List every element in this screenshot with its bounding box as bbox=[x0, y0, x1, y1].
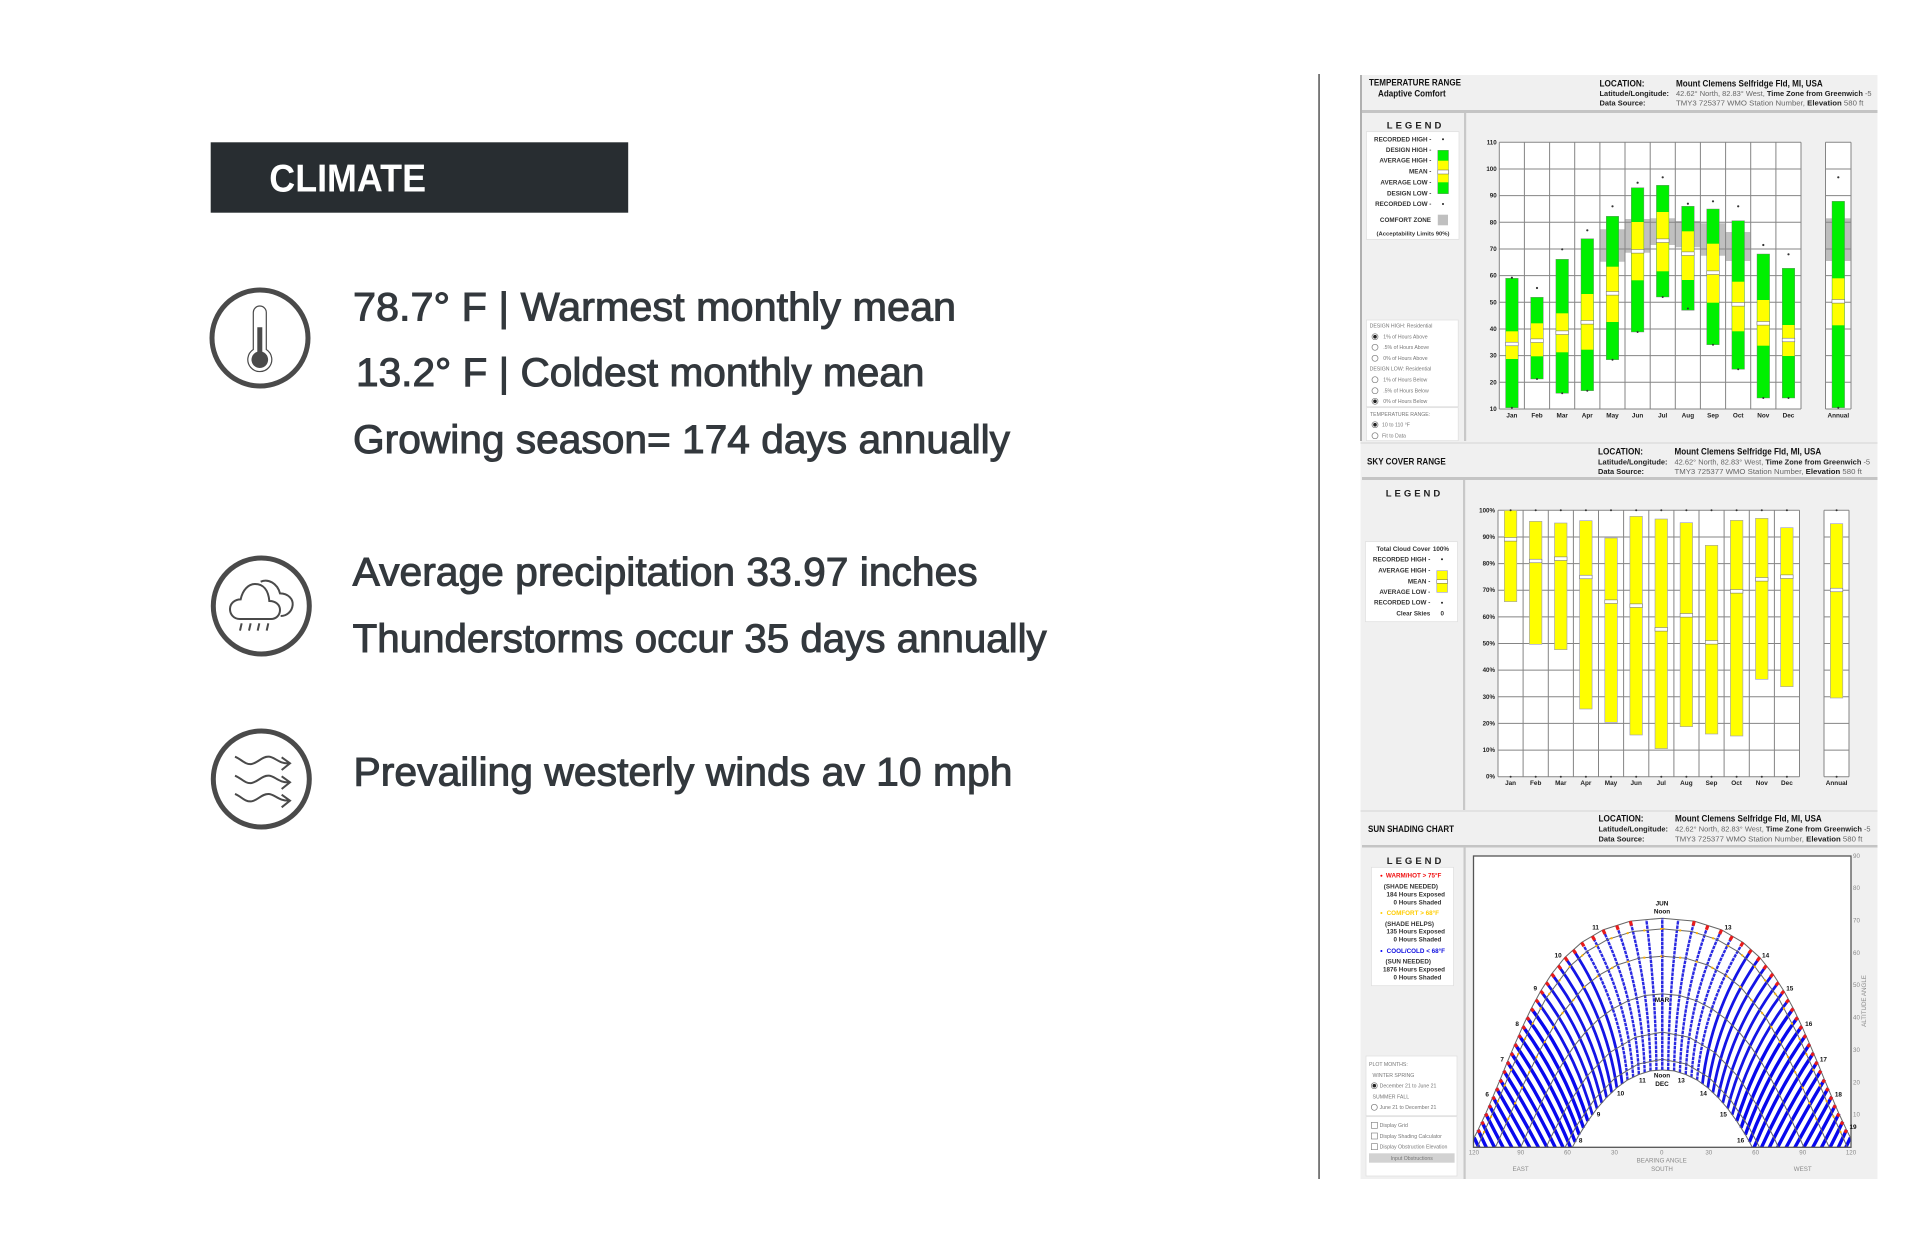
controls: plot months: Display Shading Calculator bbox=[1380, 1134, 1442, 1140]
chart: sun path diagram: 15 bbox=[1786, 986, 1794, 993]
chart: sun path diagram: 9 bbox=[1534, 986, 1538, 993]
text block: precipitation bbox=[353, 550, 1047, 661]
chart: sun path diagram: 90 bbox=[1799, 1150, 1807, 1157]
chart: sun path diagram: 10 bbox=[1617, 1091, 1625, 1098]
bar chart: monthly sky cover: Annual bbox=[1826, 780, 1848, 787]
bar chart: monthly sky cover: 0% bbox=[1486, 774, 1495, 781]
bar chart: monthly temperature: Jun bbox=[1632, 412, 1643, 420]
legend: sun shading: 1876 Hours Exposed bbox=[1383, 967, 1445, 974]
legend: sun shading: 135 Hours Exposed bbox=[1387, 929, 1445, 936]
controls: plot months: WINTER SPRING bbox=[1372, 1073, 1414, 1079]
controls: plot months: June 21 to December 21 bbox=[1380, 1105, 1437, 1111]
controls: design options: 0% of Hours Below bbox=[1383, 399, 1428, 405]
controls: plot months: SUMMER FALL bbox=[1372, 1094, 1409, 1100]
legend: temperature: LEGEND bbox=[1387, 120, 1444, 131]
header: temperature range: Adaptive Comfort bbox=[1378, 89, 1446, 99]
panel: climate charts bbox=[1360, 75, 1878, 1241]
legend: sun shading: WARM/HOT > 75°F bbox=[1386, 872, 1442, 880]
controls: design options: Fit to Data bbox=[1382, 434, 1406, 440]
chart: sun path diagram: 18 bbox=[1835, 1091, 1842, 1098]
chart: sun path diagram: 30 bbox=[1853, 1047, 1860, 1054]
controls: design options: 1% of Hours Above bbox=[1383, 334, 1428, 340]
bar chart: monthly temperature: 20 bbox=[1490, 379, 1497, 386]
header: temperature range: Latitude/Longitude: bbox=[1600, 89, 1669, 98]
bar chart: monthly temperature: Annual bbox=[1827, 412, 1849, 420]
text block: wind: Prevailing westerly winds av 10 mph bbox=[354, 750, 1012, 794]
chart: sun path diagram: 6 bbox=[1485, 1091, 1489, 1098]
bar chart: monthly temperature: Feb bbox=[1531, 412, 1543, 420]
bar chart: monthly sky cover: Apr bbox=[1580, 780, 1592, 787]
bar chart: monthly sky cover: 80% bbox=[1483, 561, 1495, 568]
header: temperature range: TMY3 725377 WMO Station Number, Elevation 580 ft bbox=[1676, 99, 1864, 108]
legend: sun shading: (SHADE HELPS) bbox=[1385, 921, 1434, 928]
header: temperature range bbox=[1362, 77, 1878, 113]
bar chart: monthly sky cover: 90% bbox=[1483, 534, 1495, 541]
text block: temperature: Growing season= 174 days annually bbox=[353, 418, 1010, 462]
bar chart: monthly sky cover: 20% bbox=[1483, 720, 1495, 727]
bar chart: monthly sky cover: Nov bbox=[1756, 780, 1768, 787]
header: sky cover: SKY COVER RANGE bbox=[1367, 457, 1446, 467]
chart: sun path diagram: 40 bbox=[1853, 1014, 1860, 1022]
chart: sun path diagram: 50 bbox=[1853, 982, 1860, 989]
bar chart: monthly sky cover: Dec bbox=[1781, 780, 1793, 787]
legend: sun shading: (SUN NEEDED) bbox=[1386, 959, 1431, 966]
header: sky cover bbox=[1362, 446, 1878, 480]
legend: sky cover: RECORDED LOW - bbox=[1374, 600, 1430, 607]
chart: sun path diagram: 60 bbox=[1564, 1150, 1571, 1157]
bar chart: monthly temperature: May bbox=[1606, 412, 1619, 420]
chart: sun path diagram: 16 bbox=[1805, 1021, 1813, 1028]
chart: sun path diagram: 30 bbox=[1611, 1150, 1618, 1157]
bar chart: monthly sky cover: Jul bbox=[1657, 780, 1666, 787]
bar chart: monthly sky cover: May bbox=[1605, 780, 1618, 787]
bar chart: monthly temperature: Oct bbox=[1733, 412, 1744, 420]
bar chart: monthly sky cover: Oct bbox=[1731, 780, 1743, 787]
legend: temperature: AVERAGE LOW - bbox=[1380, 180, 1431, 187]
controls: design options bbox=[1366, 320, 1458, 441]
legend: temperature: DESIGN HIGH - bbox=[1386, 147, 1431, 154]
bar chart: monthly sky cover: 100% bbox=[1479, 507, 1495, 514]
chart: sun path diagram: 9 bbox=[1597, 1111, 1601, 1118]
chart: sun path diagram: BEARING ANGLE bbox=[1637, 1158, 1687, 1165]
chart: sun path diagram: 7 bbox=[1500, 1056, 1504, 1063]
chart: sun path diagram: 90 bbox=[1517, 1150, 1525, 1157]
controls: design options: TEMPERATURE RANGE: bbox=[1370, 412, 1430, 418]
bar chart: monthly sky cover: Jun bbox=[1631, 780, 1642, 787]
icon: rain cloud bbox=[213, 558, 309, 654]
legend: sun shading: COMFORT > 68°F bbox=[1387, 909, 1439, 917]
chart: sun path diagram: 90 bbox=[1853, 853, 1860, 860]
chart: sun path diagram: EAST bbox=[1513, 1166, 1529, 1173]
legend: temperature: MEAN - bbox=[1409, 169, 1431, 176]
legend: temperature: (Acceptability Limits 90%) bbox=[1376, 231, 1450, 237]
bar chart: monthly sky cover: Sep bbox=[1706, 780, 1717, 787]
bar chart: monthly sky cover: Jan bbox=[1505, 780, 1516, 787]
legend: sky cover: AVERAGE LOW - bbox=[1379, 589, 1430, 596]
chart: sun path diagram: ALTITUDE ANGLE bbox=[1861, 975, 1868, 1027]
panel: temperature range chart bbox=[1362, 77, 1878, 441]
icon: wind bbox=[213, 731, 309, 827]
bar chart: monthly sky cover: 40% bbox=[1483, 667, 1495, 674]
panel: sun shading chart bbox=[1362, 815, 1878, 1179]
text block: precipitation: Average precipitation 33.97 inches bbox=[353, 550, 978, 594]
header: sky cover: Latitude/Longitude: bbox=[1598, 457, 1668, 466]
chart: sun path diagram: 8 bbox=[1579, 1137, 1583, 1144]
header: sun shading: Data Source: bbox=[1598, 834, 1644, 843]
bar chart: monthly temperature: 70 bbox=[1490, 246, 1497, 253]
header: temperature range: Data Source: bbox=[1600, 99, 1646, 108]
bar chart: monthly temperature: 50 bbox=[1490, 299, 1497, 306]
legend: sky cover bbox=[1365, 489, 1458, 622]
chart: sun path diagram: 60 bbox=[1752, 1150, 1760, 1157]
header: temperature range: TEMPERATURE RANGE bbox=[1369, 77, 1461, 87]
bar chart: monthly temperature: Apr bbox=[1582, 412, 1593, 420]
legend: sun shading: 184 Hours Exposed bbox=[1387, 891, 1445, 898]
chart: sun path diagram: 14 bbox=[1700, 1091, 1707, 1098]
bar chart: monthly sky cover: 60% bbox=[1483, 614, 1495, 621]
legend: temperature bbox=[1366, 120, 1459, 239]
chart: sun path diagram: Noon bbox=[1654, 1073, 1670, 1080]
chart: sun path diagram: 120 bbox=[1846, 1150, 1857, 1157]
legend: sun shading: 0 Hours Shaded bbox=[1393, 937, 1442, 944]
chart: sun path diagram: SOUTH bbox=[1651, 1166, 1673, 1173]
chart: sun path diagram: 15 bbox=[1720, 1111, 1727, 1118]
chart: sun path diagram: Noon bbox=[1654, 909, 1670, 916]
chart: sun path diagram: 16 bbox=[1737, 1137, 1745, 1144]
legend: sun shading: COOL/COLD < 68°F bbox=[1387, 947, 1445, 955]
header: sun shading: Mount Clemens Selfridge Fld, MI, USA bbox=[1675, 814, 1822, 824]
legend: sun shading bbox=[1371, 856, 1454, 986]
legend: temperature: RECORDED HIGH - bbox=[1374, 136, 1431, 143]
bar chart: monthly sky cover: Feb bbox=[1530, 780, 1541, 787]
chart: sun path diagram: 120 bbox=[1469, 1150, 1480, 1157]
header: sun shading bbox=[1362, 814, 1878, 848]
chart: sun path diagram: 20 bbox=[1853, 1080, 1860, 1086]
legend: temperature: AVERAGE HIGH - bbox=[1379, 158, 1431, 165]
controls: plot months bbox=[1366, 1056, 1457, 1176]
bar chart: monthly temperature: 10 bbox=[1490, 406, 1497, 413]
chart: sun path diagram: 8 bbox=[1515, 1021, 1519, 1028]
controls: plot months: PLOT MONTHS: bbox=[1369, 1062, 1408, 1068]
bar chart: monthly temperature: 90 bbox=[1490, 193, 1497, 200]
controls: design options: DESIGN HIGH: Residential bbox=[1370, 324, 1432, 330]
legend: sky cover: 100% bbox=[1433, 546, 1449, 553]
header: sky cover: Data Source: bbox=[1598, 467, 1644, 476]
controls: plot months: December 21 to June 21 bbox=[1380, 1084, 1437, 1090]
legend: sky cover: LEGEND bbox=[1386, 489, 1443, 500]
header: sun shading: TMY3 725377 WMO Station Number, Elevation 580 ft bbox=[1675, 834, 1863, 843]
title text: CLIMATE bbox=[269, 158, 426, 201]
chart: sun path diagram: 0 bbox=[1660, 1150, 1664, 1157]
bar chart: monthly temperature: Sep bbox=[1707, 412, 1719, 420]
header: sun shading: SUN SHADING CHART bbox=[1368, 824, 1455, 834]
chart: sun path diagram: 14 bbox=[1762, 952, 1770, 959]
chart: sun path diagram: JUN bbox=[1656, 901, 1669, 908]
controls: design options: 0% of Hours Above bbox=[1383, 356, 1428, 362]
legend: sky cover: RECORDED HIGH - bbox=[1373, 556, 1430, 563]
chart: sun path diagram: 60 bbox=[1853, 950, 1860, 957]
chart: sun path diagram: 70 bbox=[1853, 918, 1860, 924]
bar chart: monthly temperature: Jul bbox=[1658, 412, 1668, 420]
legend: temperature: COMFORT ZONE bbox=[1380, 217, 1431, 224]
chart: sun path diagram: 11 bbox=[1592, 925, 1599, 932]
chart: sun path diagram: 10 bbox=[1555, 952, 1562, 959]
bar chart: monthly temperature: Aug bbox=[1682, 412, 1694, 420]
legend: sky cover: Total Cloud Cover bbox=[1377, 546, 1431, 553]
header: temperature range: Mount Clemens Selfridge Fld, MI, USA bbox=[1676, 78, 1823, 88]
title banner bbox=[211, 142, 628, 213]
text block: temperature bbox=[353, 286, 1010, 462]
legend: sun shading: 0 Hours Shaded bbox=[1393, 899, 1442, 906]
bar chart: monthly sky cover: 50% bbox=[1483, 640, 1495, 648]
chart: sun path diagram: MAR bbox=[1655, 997, 1670, 1004]
legend: sky cover: MEAN - bbox=[1408, 578, 1430, 585]
bar chart: monthly temperature: 60 bbox=[1490, 273, 1497, 280]
chart: sun path diagram: DEC bbox=[1655, 1081, 1669, 1088]
bar chart: monthly temperature: Nov bbox=[1757, 412, 1770, 420]
controls: design options: DESIGN LOW: Residential bbox=[1370, 366, 1431, 372]
bar chart: monthly temperature: Mar bbox=[1557, 412, 1568, 420]
header: temperature range: LOCATION: bbox=[1600, 78, 1645, 88]
chart: sun path diagram: 19 bbox=[1849, 1124, 1857, 1131]
controls: design options: 10 to 110 °F bbox=[1382, 422, 1410, 428]
controls: design options: .5% of Hours Below bbox=[1383, 388, 1429, 394]
chart: sun path diagram: 80 bbox=[1853, 885, 1860, 892]
bar chart: monthly sky cover: Mar bbox=[1555, 780, 1567, 787]
legend: sun shading: LEGEND bbox=[1387, 856, 1444, 867]
header: sun shading: Latitude/Longitude: bbox=[1598, 825, 1668, 834]
controls: design options: .5% of Hours Above bbox=[1383, 345, 1429, 351]
bar chart: monthly sky cover: Aug bbox=[1680, 780, 1693, 787]
header: sky cover: TMY3 725377 WMO Station Number, Elevation 580 ft bbox=[1674, 467, 1863, 476]
bar chart: monthly temperature: 110 bbox=[1487, 139, 1497, 146]
legend: sky cover: 0 bbox=[1440, 610, 1444, 617]
bar chart: monthly temperature: 40 bbox=[1490, 326, 1497, 333]
chart: sun path diagram: 13 bbox=[1678, 1077, 1685, 1084]
text block: temperature: 13.2° F | Coldest monthly mean bbox=[356, 351, 924, 395]
bar chart: monthly temperature: 80 bbox=[1490, 219, 1497, 226]
bar chart: monthly temperature: Dec bbox=[1783, 412, 1795, 420]
bar chart: monthly temperature: Jan bbox=[1506, 412, 1518, 420]
text block: temperature: 78.7° F | Warmest monthly mean bbox=[353, 286, 956, 330]
bar chart: monthly sky cover bbox=[1479, 507, 1849, 787]
legend: sky cover: AVERAGE HIGH - bbox=[1378, 567, 1430, 574]
header: sky cover: Mount Clemens Selfridge Fld, MI, USA bbox=[1674, 446, 1822, 456]
bar chart: monthly temperature: 30 bbox=[1490, 353, 1497, 360]
bar chart: monthly temperature bbox=[1486, 139, 1851, 420]
controls: plot months: Display Grid bbox=[1380, 1123, 1408, 1129]
chart: sun path diagram: 11 bbox=[1639, 1077, 1646, 1084]
bar chart: monthly sky cover: 70% bbox=[1483, 587, 1495, 594]
bar chart: monthly temperature: 100 bbox=[1486, 166, 1497, 173]
legend: temperature: RECORDED LOW - bbox=[1375, 201, 1431, 208]
icon: thermometer bbox=[212, 290, 308, 386]
bar chart: monthly sky cover: 10% bbox=[1483, 747, 1495, 754]
chart: sun path diagram: WEST bbox=[1794, 1166, 1812, 1173]
header: temperature range: 42.62° North, 82.83° West, Time Zone from Greenwich -5 bbox=[1676, 89, 1872, 98]
panel: sky cover range chart bbox=[1362, 446, 1878, 810]
chart: sun path diagram: 17 bbox=[1820, 1056, 1827, 1063]
header: sun shading: LOCATION: bbox=[1598, 814, 1644, 824]
controls: design options: 1% of Hours Below bbox=[1383, 378, 1428, 384]
header: sun shading: 42.62° North, 82.83° West, Time Zone from Greenwich -5 bbox=[1675, 825, 1871, 834]
chart: sun path diagram: 30 bbox=[1705, 1150, 1713, 1157]
header: sky cover: 42.62° North, 82.83° West, Time Zone from Greenwich -5 bbox=[1674, 457, 1870, 466]
text block: precipitation: Thunderstorms occur 35 days annually bbox=[353, 617, 1047, 661]
bar chart: monthly sky cover: 30% bbox=[1483, 694, 1495, 701]
controls: plot months: Display Obstruction Elevation bbox=[1380, 1144, 1447, 1150]
legend: temperature: DESIGN LOW - bbox=[1387, 190, 1431, 197]
chart: sun path diagram bbox=[1469, 854, 1866, 1171]
legend: sun shading: 0 Hours Shaded bbox=[1393, 975, 1442, 982]
controls: plot months: Input Obstructions bbox=[1391, 1156, 1433, 1162]
legend: sun shading: (SHADE NEEDED) bbox=[1384, 883, 1438, 890]
chart: sun path diagram: 13 bbox=[1724, 925, 1732, 932]
legend: sky cover: Clear Skies bbox=[1396, 610, 1431, 617]
header: sky cover: LOCATION: bbox=[1598, 446, 1643, 456]
chart: sun path diagram: 10 bbox=[1853, 1112, 1860, 1118]
